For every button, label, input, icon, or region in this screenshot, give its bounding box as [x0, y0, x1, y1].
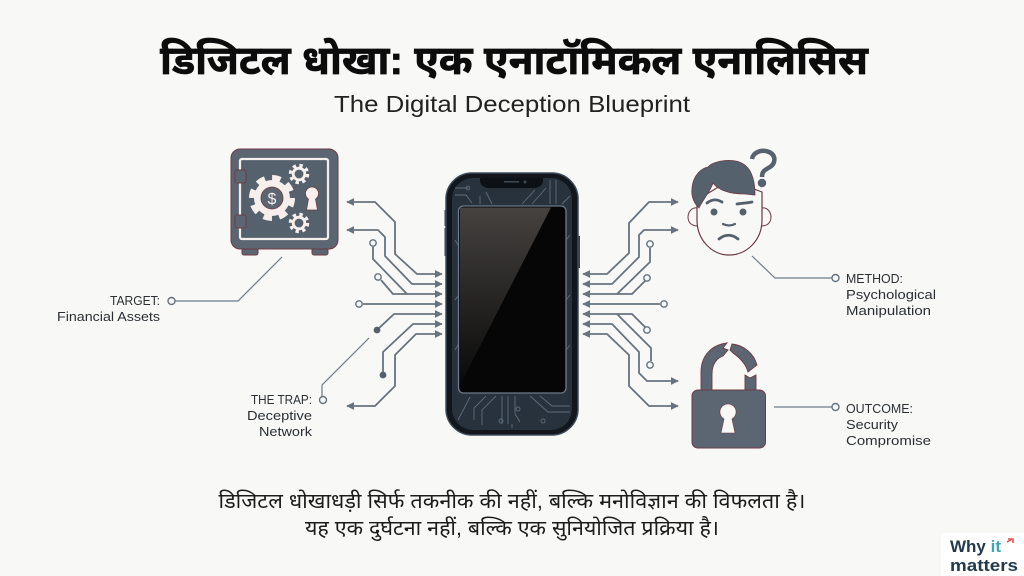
eyes, brows and mouth [707, 200, 752, 239]
conclusion text: यह एक दुर्घटना नहीं, बल्कि एक सुनियोजित प्रक्रिया है। [305, 515, 719, 542]
icon: broken padlock [692, 343, 766, 448]
label: method: METHOD: [846, 272, 903, 286]
label: outcome: Compromise [846, 434, 931, 448]
icon: safe keyhole [305, 187, 319, 210]
icon: lower small gear [290, 214, 308, 232]
phone screen [458, 206, 566, 393]
label: target [57, 257, 282, 324]
title: डिजिटल धोखा: एक एनाटॉमिकल एनालिसिस [160, 38, 870, 83]
label: the trap: Deceptive [247, 409, 312, 423]
hair [692, 160, 755, 208]
label: target: TARGET: [110, 294, 160, 308]
right circuit network [583, 202, 678, 406]
label: the trap [247, 338, 369, 439]
question mark [752, 151, 774, 188]
label: target: Financial Assets [57, 310, 160, 324]
label: outcome: Security [846, 418, 899, 432]
phone notch [480, 178, 543, 188]
smartphone [444, 173, 580, 435]
label: outcome: OUTCOME: [846, 402, 913, 416]
conclusion text [218, 488, 806, 542]
label: the trap: Network [259, 425, 313, 439]
icon: upper small gear [290, 166, 308, 182]
phone circuit traces [455, 180, 570, 428]
label: method [752, 256, 936, 318]
label: outcome [774, 402, 931, 448]
subtitle: The Digital Deception Blueprint [334, 91, 691, 117]
logo: why it matters: matters [950, 556, 1018, 575]
left circuit network [347, 202, 442, 406]
logo: why it matters [941, 533, 1024, 576]
icon: confused face with question mark [688, 151, 774, 255]
icon: large dollar gear: $ [268, 191, 277, 208]
label: method: Psychological [846, 288, 936, 302]
conclusion text: डिजिटल धोखाधड़ी सिर्फ तकनीक की नहीं, बल्कि मनोविज्ञान की विफलता है। [218, 488, 806, 513]
icon: safe with gears [231, 149, 338, 255]
label: the trap: THE TRAP: [251, 393, 312, 407]
label: method: Manipulation [846, 304, 931, 318]
logo: why it matters: Why it [950, 537, 1001, 556]
lock keyhole [720, 404, 736, 433]
